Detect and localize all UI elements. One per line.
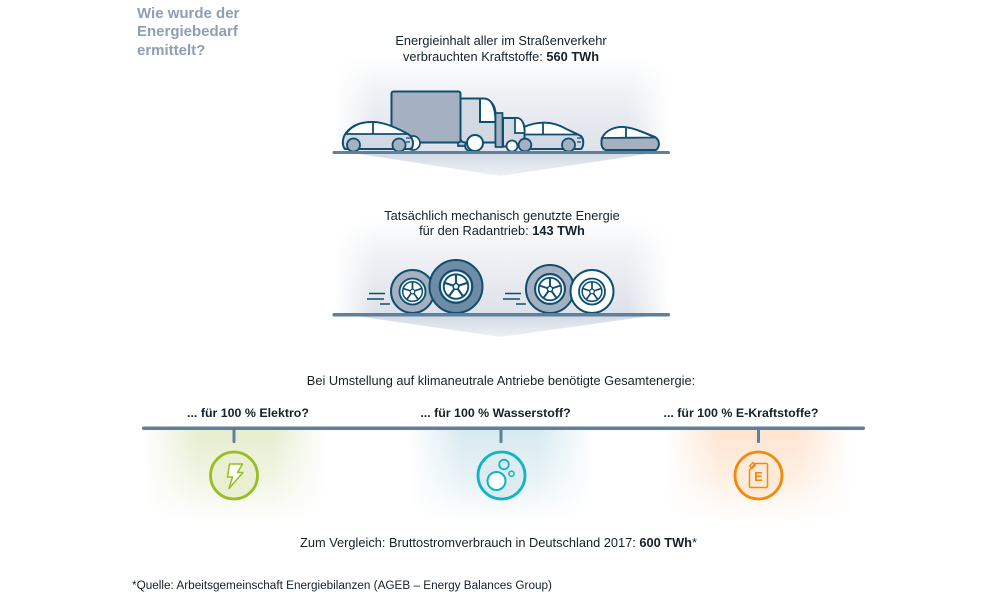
- text: source: *Quelle: Arbeitsgemeinschaft Energiebilanzen (AGEB – Energy Balances Group): [132, 579, 552, 592]
- road: top: [332, 151, 670, 154]
- text: comparison: Zum Vergleich: Bruttostromverbrauch in Deutschland 2017: 600 TWh*: [300, 535, 697, 550]
- text: fuel energy: verbrauchten Kraftstoffe: 560 TWh: [403, 49, 599, 64]
- icon: wheel 4: [570, 270, 614, 313]
- icon: hydrogen bubbles: [478, 452, 525, 499]
- label: E-Kraftstoffe: ... für 100 % E-Kraftstoffe?: [664, 406, 818, 420]
- icon: fuel canister: [735, 452, 782, 499]
- road: middle: [332, 313, 670, 316]
- icon: car middle: [524, 122, 583, 152]
- icon: motion lines left: [367, 294, 390, 304]
- icon: lightning: [210, 452, 258, 499]
- heading: ermittelt?: [137, 42, 205, 59]
- background: middle gradient: [344, 237, 660, 313]
- text: mechanical energy: [384, 208, 620, 238]
- text: fuel energy: Energieinhalt aller im Straßenverkehr: [395, 33, 607, 48]
- icon: fuel canister: E: [754, 469, 763, 484]
- heading: Energiebedarf: [137, 23, 239, 40]
- illustration: vehicles: [343, 92, 659, 153]
- timeline: [142, 426, 865, 443]
- text: fuel energy: [395, 33, 607, 64]
- icon: wheel 2: [430, 260, 482, 313]
- arrow: funnel top: [360, 154, 647, 176]
- arrow: funnel middle: [360, 316, 647, 337]
- heading: [137, 5, 240, 59]
- icon: truck: [392, 92, 496, 151]
- icon: small truck: [496, 113, 531, 152]
- label: Wasserstoff: ... für 100 % Wasserstoff?: [420, 406, 571, 420]
- illustration: wheels: [367, 260, 614, 313]
- heading: Wie wurde der: [137, 5, 240, 22]
- background: green glow: [152, 430, 318, 508]
- icon: wheel 3: [526, 265, 574, 313]
- background: blue glow: [419, 430, 583, 506]
- icon: car right: [601, 127, 659, 153]
- text: mechanical energy: für den Radantrieb: 143 TWh: [419, 223, 585, 238]
- label: Elektro: ... für 100 % Elektro?: [187, 406, 309, 420]
- background: top gradient: [345, 75, 660, 151]
- icon: wheel 1: [391, 270, 434, 313]
- text: total energy: Bei Umstellung auf klimaneutrale Antriebe benötigte Gesamtenergie:: [307, 373, 695, 388]
- text: mechanical energy: Tatsächlich mechanisch genutzte Energie: [384, 208, 620, 223]
- background: orange glow: [676, 430, 842, 508]
- icon: car left: [343, 122, 420, 152]
- icon: motion lines right: [503, 294, 526, 304]
